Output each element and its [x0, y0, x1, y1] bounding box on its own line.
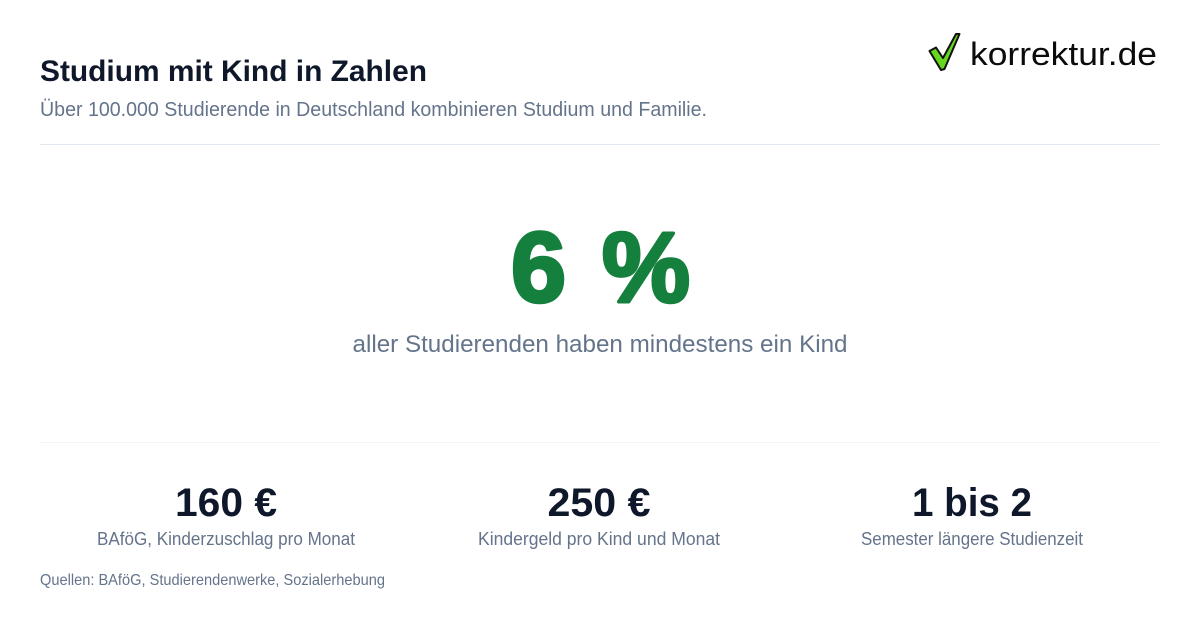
icon: check mark — [930, 34, 960, 70]
title: Studium mit Kind in Zahlen — [40, 55, 427, 88]
sources: Quellen: BAföG, Studierendenwerke, Sozialerhebung — [40, 572, 385, 589]
stat: Kindergeld: 250 € — [548, 481, 650, 525]
stat: Studienzeit: 1 bis 2 — [912, 481, 1032, 525]
stat: Studienzeit: Semester längere Studienzeit — [861, 529, 1083, 549]
hero caption: aller Studierenden haben mindestens ein Kind — [352, 331, 848, 358]
stat: BAföG — [97, 481, 355, 549]
hero statistic: 6 % — [511, 212, 690, 322]
stat: BAföG: BAföG, Kinderzuschlag pro Monat — [97, 529, 355, 549]
stat: Kindergeld: Kindergeld pro Kind und Monat — [478, 529, 720, 549]
stat: Studienzeit — [861, 481, 1083, 549]
stat: Kindergeld — [478, 481, 720, 549]
stat: BAföG: 160 € — [175, 481, 277, 525]
logo: korrektur.de — [930, 34, 1157, 72]
logo wordmark: korrektur.de — [970, 36, 1157, 72]
subtitle: Über 100.000 Studierende in Deutschland kombinieren Studium und Familie. — [40, 99, 707, 121]
